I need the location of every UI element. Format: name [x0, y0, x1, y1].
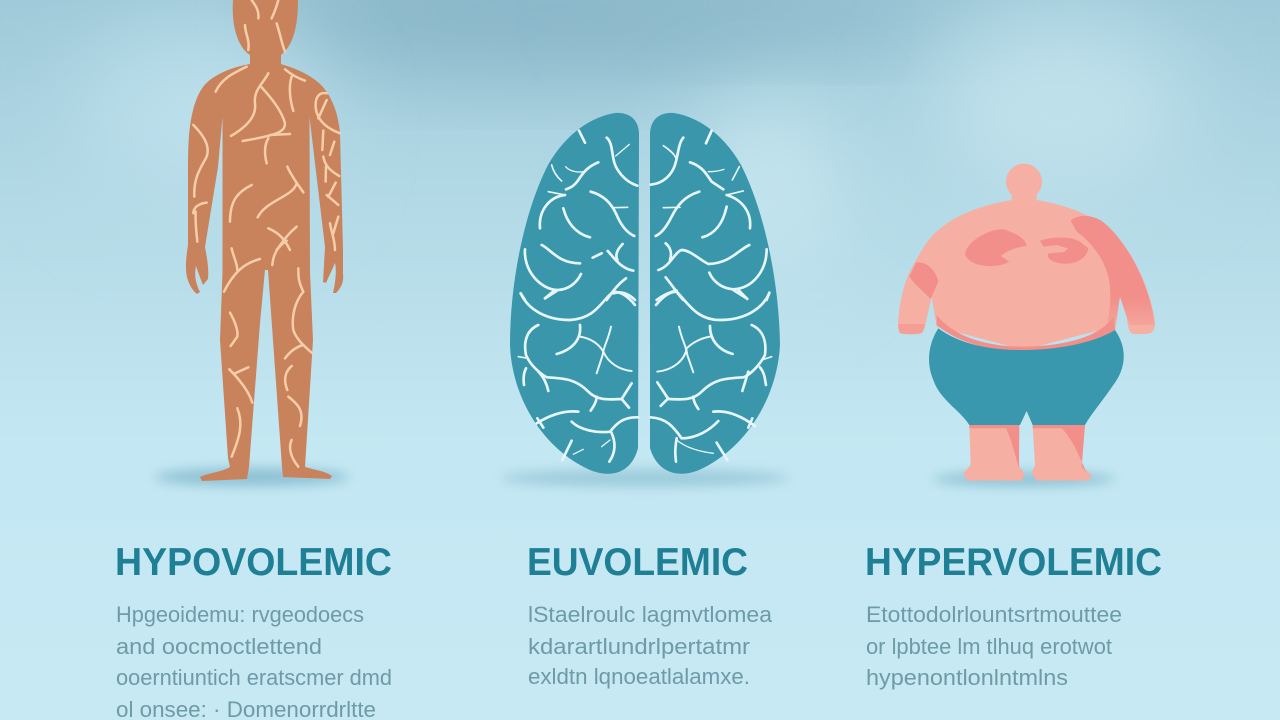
- head: [1006, 164, 1042, 200]
- figure: hypervolemic body: [898, 164, 1155, 486]
- description: exldtn lqnoeatlalamxe.: [528, 664, 750, 689]
- description: hypenontlonlntmlns: [866, 665, 1068, 690]
- darker skin patches: [898, 216, 1155, 351]
- ground shadow: [500, 469, 790, 487]
- description: Hpgeoidemu: rvgeodoecs: [116, 602, 364, 627]
- description: [116, 602, 392, 720]
- description: or lpbtee lm tlhuq erotwot: [866, 634, 1112, 659]
- column: hypovolemic text: [115, 541, 392, 720]
- right shoulder and arm patch: [1071, 216, 1155, 330]
- figure: euvolemic brain: [500, 113, 790, 487]
- description: kdarartlundrlpertatmr: [528, 634, 750, 659]
- right leg: [1032, 426, 1092, 481]
- description: [866, 602, 1122, 690]
- body silhouette: [898, 192, 1155, 350]
- description: ooerntiuntich eratscmer dmd: [116, 665, 392, 690]
- skin veins lower: [224, 241, 312, 467]
- column: euvolemic text: [527, 541, 773, 689]
- description: and oocmoctlettend: [116, 634, 322, 659]
- ground shadow: [932, 472, 1116, 486]
- leg shading: [969, 425, 1087, 473]
- description: Etottodolrlountsrtmouttee: [866, 602, 1122, 627]
- skin veins upper: [193, 0, 340, 250]
- ground shadow: [154, 468, 350, 486]
- left leg: [963, 426, 1025, 481]
- body silhouette: [186, 0, 343, 481]
- brain folds upper: [521, 131, 769, 300]
- heading: HYPERVOLEMIC: [865, 541, 1162, 584]
- brain folds lower: [518, 290, 772, 462]
- heading: EUVOLEMIC: [527, 541, 748, 584]
- figure: hypovolemic body: [154, 0, 350, 486]
- column: hypervolemic text: [865, 541, 1162, 690]
- brain right lobe: [650, 113, 780, 474]
- shorts: [929, 328, 1124, 425]
- description: [528, 602, 773, 689]
- brain left lobe: [510, 113, 639, 474]
- description: lStaelroulc lagmvtlomea: [528, 602, 773, 627]
- heading: HYPOVOLEMIC: [115, 541, 392, 584]
